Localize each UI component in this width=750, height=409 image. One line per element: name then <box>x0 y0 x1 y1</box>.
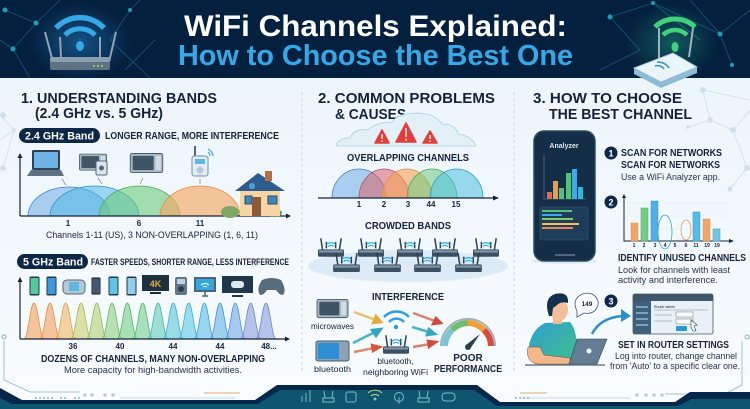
icon: wifi and router: bluetooth, <box>378 356 414 366</box>
step 3 text: from 'Auto' to a specific clear one. <box>610 361 740 371</box>
icon: microwave and outlet <box>79 154 107 175</box>
heading: 1. UNDERSTANDING BANDS <box>21 90 217 107</box>
header band <box>0 0 750 80</box>
icon: phone analyzer: Analyzer <box>549 143 579 150</box>
arrow: to router admin <box>592 309 631 334</box>
icon: bluetooth source <box>314 341 351 374</box>
chart axes and labels: 40 <box>116 342 125 351</box>
chart: channel usage <box>622 194 734 249</box>
step 1: SCAN FOR NETWORKS <box>621 160 720 171</box>
chart: channel usage: 3 <box>654 243 657 249</box>
dividers <box>302 92 514 372</box>
step 1: 1 <box>608 148 614 158</box>
panel: how to choose <box>525 90 746 371</box>
icon: cloud with warnings <box>336 113 476 146</box>
chart axes and labels: 44 <box>169 342 178 351</box>
icon: wifi and router <box>363 312 428 377</box>
2.4 GHz band label <box>19 128 279 143</box>
icons: 5 GHz devices: 4K <box>150 279 162 289</box>
chart: channel usage: 6 <box>685 243 688 249</box>
overlapping channels heading: OVERLAPPING CHANNELS <box>347 153 469 164</box>
5 GHz band label: FASTER SPEEDS, SHORTER RANGE, LESS INTERFERENCE <box>91 257 289 267</box>
2.4 GHz band label: 2.4 GHz Band <box>25 130 94 142</box>
router admin window: Router admin <box>654 305 675 309</box>
chart axes and labels <box>18 277 290 351</box>
step 3 number: 3 <box>608 296 614 306</box>
router admin window <box>633 294 713 334</box>
decorative network, panel <box>0 88 750 191</box>
heading: 3. HOW TO CHOOSE <box>533 90 682 107</box>
heading: & CAUSES <box>335 106 406 123</box>
5 GHz caption: DOZENS OF CHANNELS, MANY NON-OVERLAPPING <box>41 354 265 365</box>
chart: channel usage: 19 <box>714 243 720 249</box>
step 1: SCAN FOR NETWORKS <box>621 148 722 159</box>
chart: overlapping channels <box>318 169 499 209</box>
2.4 GHz band label: LONGER RANGE, MORE INTERFERENCE <box>105 131 279 142</box>
icon: microwave source: microwaves <box>311 321 354 331</box>
panel: understanding bands <box>17 90 291 375</box>
step 2 text: activity and interference. <box>618 275 718 285</box>
chart: channel usage: 19 <box>704 243 710 249</box>
crowded bands heading: CROWDED BANDS <box>365 221 451 232</box>
icon: wifi and router: neighboring WiFi <box>363 367 428 377</box>
heading <box>21 90 217 122</box>
5 GHz caption <box>41 354 265 375</box>
gauge: poor performance <box>434 319 502 375</box>
chart: channel usage: 2 <box>643 243 646 249</box>
chart: 2.4 GHz channels: 1 <box>66 219 71 228</box>
icon: right router <box>634 19 697 88</box>
illustration: crowded routers <box>308 238 508 282</box>
step 2 number <box>604 196 618 208</box>
illustration: person with laptop <box>525 293 607 365</box>
step 1: Use a WiFi Analyzer app. <box>621 172 720 182</box>
icon: bluetooth source: bluetooth <box>314 364 351 374</box>
title: How to Choose the Best One <box>178 40 573 72</box>
chart: overlapping channels: 44 <box>427 200 436 209</box>
chart: 2.4 GHz channels <box>18 153 291 228</box>
icon: house <box>221 171 285 218</box>
icon: left router <box>45 18 116 70</box>
chart: overlapping channels: 1 <box>357 200 362 209</box>
5 GHz caption: More capacity for high-bandwidth activities. <box>64 365 242 375</box>
heading: THE BEST CHANNEL <box>549 106 692 123</box>
title <box>178 10 573 72</box>
step 2 text <box>618 253 746 285</box>
footer icons <box>302 390 455 404</box>
chart: 2.4 GHz channels: 11 <box>196 219 205 228</box>
chart: channel usage: 11 <box>693 243 699 249</box>
step 3 text: SET IN ROUTER SETTINGS <box>618 340 729 351</box>
gauge: poor performance: POOR <box>453 353 484 364</box>
chart: overlapping channels: 3 <box>406 200 411 209</box>
chart: channel usage: 1 <box>633 243 636 249</box>
icon: phone analyzer <box>531 131 597 264</box>
icon: microwave <box>130 153 163 173</box>
chart: channel usage: 5 <box>674 243 677 249</box>
step 3 number <box>604 294 618 308</box>
chart axes and labels: 44 <box>216 342 225 351</box>
chart axes and labels: 48... <box>261 342 277 351</box>
chart: 5 GHz channels <box>24 303 276 339</box>
heading <box>318 90 495 123</box>
icon: walkie talkie <box>192 146 213 176</box>
step 2 number: 2 <box>608 198 614 208</box>
icons: 5 GHz devices <box>30 275 285 296</box>
chart: 2.4 GHz channels: 6 <box>137 219 142 228</box>
heading <box>533 90 692 123</box>
heading: (2.4 GHz vs. 5 GHz) <box>35 105 163 122</box>
interference heading: INTERFERENCE <box>372 292 444 303</box>
icon: laptop <box>27 150 64 176</box>
arrows: interference <box>353 312 441 352</box>
5 GHz band label: 5 GHz Band <box>23 256 83 268</box>
step 3 text <box>610 340 740 371</box>
speech bubble: 149 <box>582 301 593 308</box>
chart: overlapping channels: 2 <box>382 200 387 209</box>
chart: channel usage: 4 <box>664 243 667 249</box>
chart axes and labels: 36 <box>69 342 78 351</box>
step 1 <box>604 146 722 182</box>
title: WiFi Channels Explained: <box>184 10 567 43</box>
icon: microwave source <box>311 299 354 331</box>
5 GHz band label <box>17 254 289 269</box>
chart: overlapping channels: 15 <box>452 200 461 209</box>
chart caption: Channels 1-11 (US), 3 NON-OVERLAPPING (1, 6, 11) <box>46 230 258 241</box>
footer band <box>0 335 750 409</box>
step 2 text: Look for channels with least <box>618 265 730 275</box>
gauge: poor performance: PERFORMANCE <box>434 364 502 375</box>
step 3 text: Log into router, change channel <box>615 351 737 361</box>
heading: 2. COMMON PROBLEMS <box>318 90 495 107</box>
speech bubble <box>575 293 598 317</box>
panel: common problems <box>308 90 508 377</box>
